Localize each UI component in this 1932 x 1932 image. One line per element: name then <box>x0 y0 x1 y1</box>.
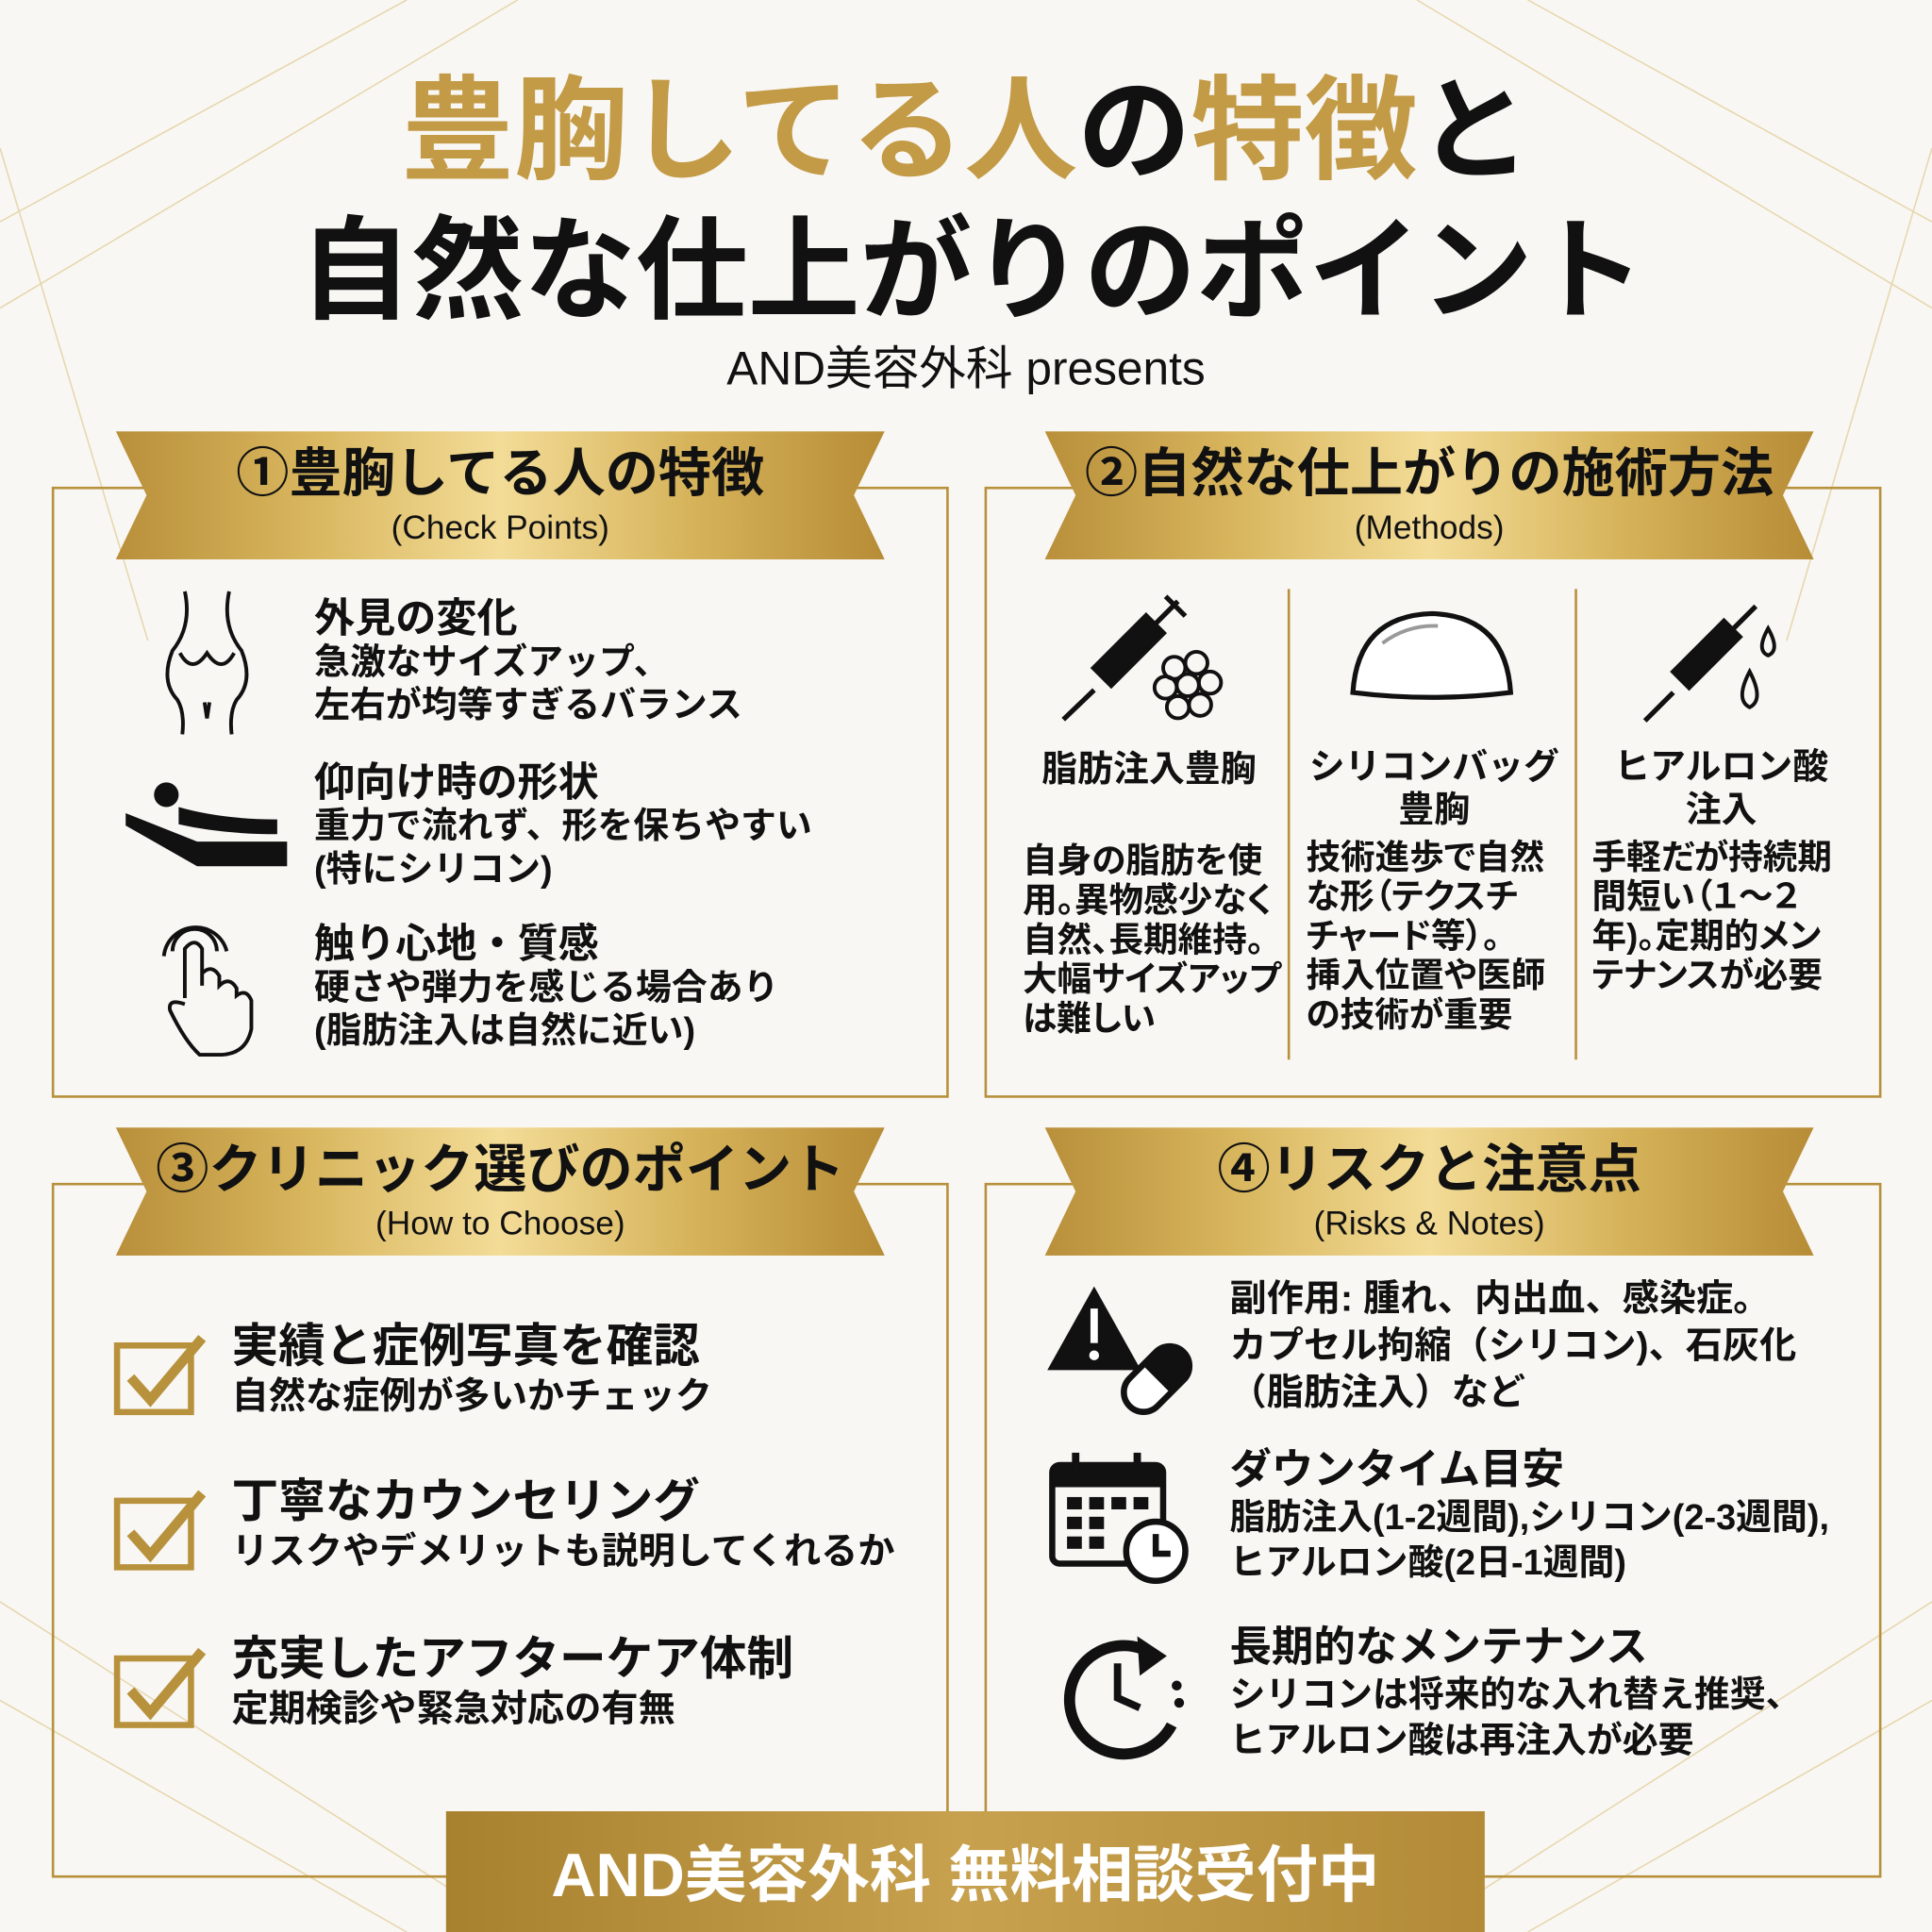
text: lying shape <box>314 759 812 890</box>
text: maintenance: シリコンは将来的な入れ替え推奨、 <box>1230 1675 1802 1715</box>
text: downtime: ヒアルロン酸(2日-1週間) <box>1230 1544 1626 1583</box>
text: check 2: 丁寧なカウンセリング <box>232 1476 700 1528</box>
text: appearance: 左右が均等すぎるバランス <box>314 687 742 725</box>
text: hyaluronic: ヒアルロン酸 <box>1614 748 1828 788</box>
text: texture: 触り心地・質感 <box>314 921 599 966</box>
text: lying shape: (特にシリコン) <box>314 850 553 890</box>
banner 3: (How to Choose) <box>375 1205 625 1242</box>
text: check 2: リスクやデメリットも説明してくれるか <box>232 1532 895 1573</box>
banner 2: ②自然な仕上がりの施術方法 <box>1085 445 1774 504</box>
icon: implant <box>1350 611 1513 700</box>
icon: check 3 <box>113 1647 206 1728</box>
panel: clinic <box>52 1183 949 1878</box>
icon: touch <box>162 925 253 1057</box>
banner 1: (Check Points) <box>391 508 609 546</box>
text: silicone: の技術が重要 <box>1306 995 1512 1034</box>
text: texture: 硬さや弾力を感じる場合あり <box>314 969 778 1008</box>
icon: syringe drops <box>1643 604 1776 723</box>
text: downtime <box>1230 1446 1829 1583</box>
icon: calendar <box>1049 1453 1189 1584</box>
icon: body <box>165 591 249 735</box>
text: fat injection: 自身の脂肪を使 <box>1023 841 1262 880</box>
text: maintenance: ヒアルロン酸は再注入が必要 <box>1230 1722 1694 1760</box>
banner 4: ④リスクと注意点 <box>1217 1141 1641 1200</box>
text: check 3: 定期検診や緊急対応の有無 <box>232 1690 675 1730</box>
text: downtime: 脂肪注入(1-2週間),シリコン(2-3週間), <box>1230 1498 1829 1538</box>
text: hyaluronic: 注入 <box>1686 791 1757 830</box>
text: texture: (脂肪注入は自然に近い) <box>314 1011 695 1051</box>
footer banner <box>446 1811 1485 1932</box>
icon: syringe with fat <box>1061 594 1223 721</box>
text: side effects: 副作用: 腫れ、内出血、感染症。 <box>1230 1279 1770 1320</box>
check items <box>113 1321 895 1730</box>
text: maintenance <box>1230 1624 1802 1760</box>
text: check 1 <box>232 1321 712 1417</box>
icon: warning pill <box>1047 1287 1192 1415</box>
text: side effects: カプセル拘縮（シリコン)、石灰化 <box>1230 1325 1796 1366</box>
text: silicone: 豊胸 <box>1398 791 1470 830</box>
text: check 1: 自然な症例が多いかチェック <box>232 1376 712 1417</box>
text: fat injection <box>1023 750 1282 1038</box>
text: hyaluronic <box>1592 747 1832 994</box>
icon: clock cycle <box>1064 1636 1185 1760</box>
text: lying shape: 仰向け時の形状 <box>314 759 599 805</box>
text: side effects: （脂肪注入）など <box>1230 1373 1525 1413</box>
text: lying shape: 重力で流れず、形を保ちやすい <box>314 808 812 846</box>
title: 自然な仕上がりのポイント <box>299 209 1645 334</box>
panel: characteristics <box>52 487 949 1098</box>
icon: check 2 <box>113 1491 206 1571</box>
text: hyaluronic: 間短い（１～２ <box>1592 877 1799 915</box>
text: hyaluronic: テナンスが必要 <box>1592 957 1823 994</box>
text: silicone: 技術進歩で自然 <box>1306 838 1544 876</box>
text: fat injection: 脂肪注入豊胸 <box>1041 750 1257 790</box>
text: maintenance: 長期的なメンテナンス <box>1230 1624 1648 1671</box>
text: silicone: 挿入位置や医師 <box>1306 957 1545 994</box>
text: check 2 <box>232 1476 895 1573</box>
text: silicone: チャード等）。 <box>1306 917 1500 955</box>
footer banner: AND美容外科 無料相談受付中 <box>551 1840 1379 1909</box>
text: fat injection: 自然、長期維持。 <box>1023 921 1264 958</box>
text: appearance: 外見の変化 <box>314 595 518 641</box>
icon: check 1 <box>113 1335 206 1415</box>
banner 2: (Methods) <box>1355 508 1504 546</box>
title <box>299 69 1645 334</box>
banner 1: ①豊胸してる人の特徴 <box>236 445 764 504</box>
text: appearance: 急激なサイズアップ、 <box>314 643 670 683</box>
text: texture <box>314 921 778 1051</box>
text: check 1: 実績と症例写真を確認 <box>232 1321 700 1373</box>
text: fat injection: 大幅サイズアップ <box>1023 959 1281 998</box>
banner 3: ③クリニック選びのポイント <box>156 1141 844 1200</box>
subtitle: AND美容外科 presents <box>726 343 1206 395</box>
banner 4: (Risks & Notes) <box>1314 1205 1545 1242</box>
banner 4 <box>1045 1127 1814 1256</box>
text: hyaluronic: 手軽だが持続期 <box>1592 838 1832 876</box>
text: side effects <box>1230 1279 1796 1413</box>
text: silicone: な形（テクスチ <box>1306 877 1518 915</box>
banner 1 <box>116 431 885 559</box>
panel: methods <box>985 487 1881 1098</box>
text: downtime: ダウンタイム目安 <box>1230 1446 1564 1493</box>
icon: lying <box>125 782 287 866</box>
text: hyaluronic: 年)。定期的メン <box>1592 917 1821 955</box>
text: check 3 <box>232 1634 793 1730</box>
text: silicone: シリコンバッグ <box>1309 748 1559 788</box>
banner 3 <box>116 1127 885 1256</box>
text: check 3: 充実したアフターケア体制 <box>232 1634 793 1686</box>
banner 2 <box>1045 431 1814 559</box>
panel: risks <box>985 1183 1881 1878</box>
text: silicone <box>1306 747 1559 1034</box>
text: fat injection: 用。異物感少なく <box>1023 881 1272 919</box>
text: fat injection: は難しい <box>1023 999 1156 1038</box>
title: 豊胸してる人の特徴と <box>401 69 1531 194</box>
text: appearance <box>314 595 742 725</box>
